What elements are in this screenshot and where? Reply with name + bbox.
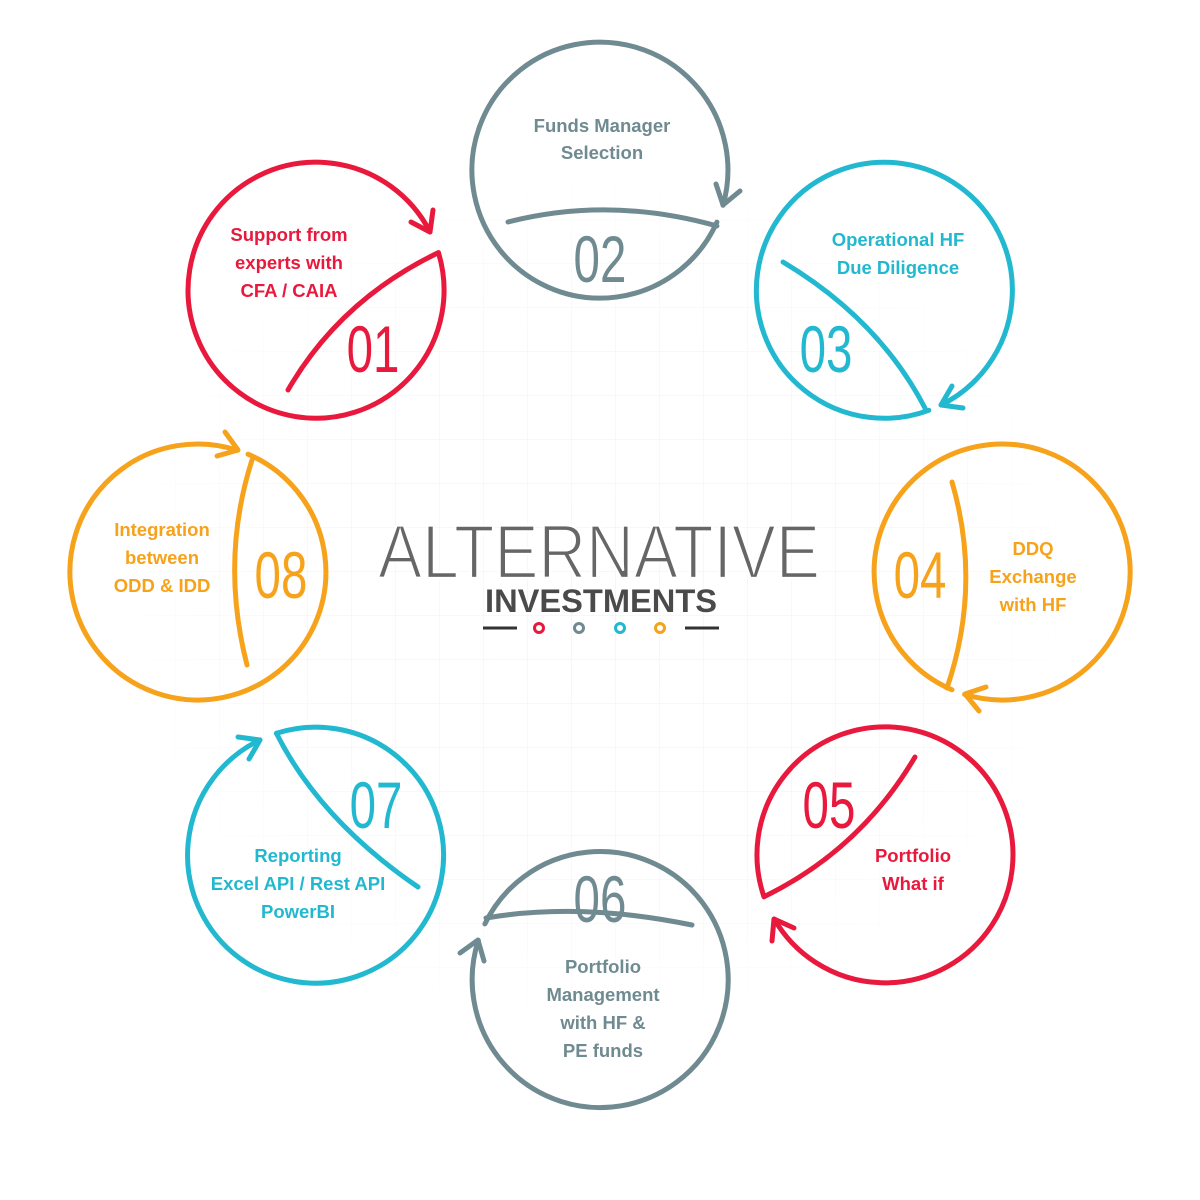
labels: Support from	[230, 224, 348, 245]
labels: with HF &	[559, 1012, 646, 1033]
labels: experts with	[235, 252, 343, 273]
labels: What if	[882, 873, 945, 894]
labels: with HF	[999, 594, 1066, 615]
numbers: 01	[347, 313, 399, 387]
labels: Due Diligence	[837, 257, 959, 278]
step 07	[188, 727, 444, 983]
step 06	[460, 852, 728, 1108]
step 03	[756, 162, 1012, 418]
numbers: 05	[803, 769, 855, 843]
title: INVESTMENTS	[485, 583, 717, 619]
labels	[114, 115, 1077, 1061]
numbers: 02	[574, 223, 626, 297]
labels: Exchange	[989, 566, 1077, 587]
labels: PowerBI	[261, 901, 335, 922]
step 01	[188, 162, 444, 418]
step 02	[472, 42, 740, 298]
numbers: 07	[350, 769, 402, 843]
labels: Excel API / Rest API	[211, 873, 385, 894]
labels: CFA / CAIA	[241, 280, 337, 301]
numbers: 04	[894, 539, 946, 613]
title: ALTERNATIVE	[378, 510, 820, 595]
title	[378, 510, 820, 632]
labels: ODD & IDD	[114, 575, 210, 596]
labels: Integration	[114, 519, 210, 540]
step 08	[70, 432, 326, 700]
numbers: 06	[574, 863, 626, 937]
labels: Management	[546, 984, 660, 1005]
labels: Portfolio	[565, 956, 641, 977]
labels: Portfolio	[875, 845, 951, 866]
step 05	[757, 727, 1013, 983]
labels: Operational HF	[832, 229, 964, 250]
labels: PE funds	[563, 1040, 643, 1061]
numbers	[255, 223, 946, 937]
labels: Funds Manager	[534, 115, 670, 136]
labels: Selection	[561, 142, 643, 163]
labels: between	[125, 547, 199, 568]
labels: DDQ	[1012, 538, 1054, 559]
labels: Reporting	[254, 845, 342, 866]
numbers: 03	[800, 313, 852, 387]
numbers: 08	[255, 539, 307, 613]
step 04	[874, 444, 1130, 711]
